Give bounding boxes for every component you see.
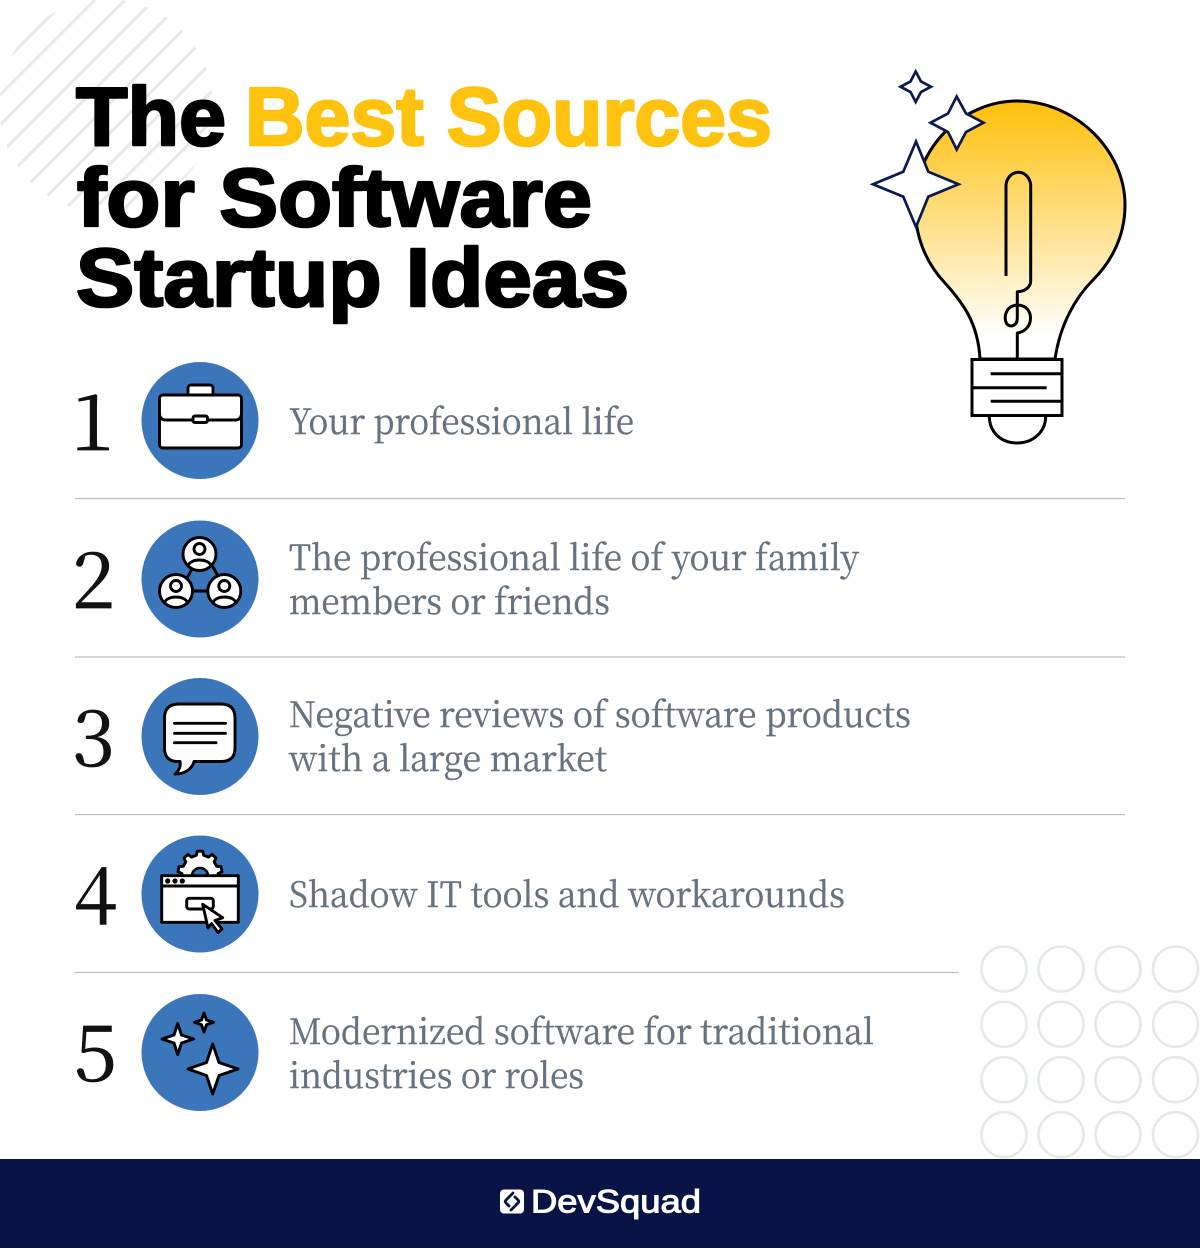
list item 5: [74, 992, 874, 1111]
number 2: 2: [72, 519, 115, 631]
list item 2: [72, 519, 860, 638]
icon: DevSquad logo mark: [500, 1190, 524, 1214]
icon: connected people: [142, 520, 258, 638]
title: for Software: [77, 151, 592, 244]
label: negative reviews: Negative reviews of software products: [289, 688, 911, 738]
label: your professional life: Your professional life: [289, 395, 634, 445]
label: negative reviews: with a large market: [288, 732, 607, 782]
footer band: [0, 1159, 1200, 1248]
icon: briefcase: [142, 362, 258, 479]
number 4: 4: [74, 834, 117, 946]
icon: sparkles: [142, 994, 258, 1111]
number 5: 5: [74, 992, 117, 1104]
label: shadow IT: Shadow IT tools and workarounds: [289, 868, 845, 918]
icon: light bulb with sparkles: [873, 72, 1125, 443]
icon: speech bubble: [142, 678, 258, 795]
number 3: 3: [72, 677, 115, 789]
label: modernized software: [289, 1005, 874, 1099]
label: negative reviews: [288, 688, 911, 782]
label: family or friends: [289, 531, 860, 625]
title: [76, 70, 772, 324]
dotted ring pattern decoration: [982, 946, 1198, 1157]
list item 1: [71, 361, 634, 479]
title: The: [76, 70, 226, 163]
list item 4: [74, 834, 845, 952]
icon: browser with gear and cursor: [142, 836, 258, 952]
label: family or friends: members or friends: [289, 575, 610, 625]
label: modernized software: industries or roles: [289, 1049, 584, 1099]
striped circle decoration: [0, 0, 212, 210]
brand name: DevSquad: [531, 1184, 701, 1220]
label: modernized software: Modernized software for traditional: [289, 1005, 874, 1055]
number 1: 1: [71, 361, 114, 473]
title: Best Sources: [245, 70, 772, 163]
list item 3: [72, 677, 911, 795]
title: Startup Ideas: [76, 231, 629, 324]
label: family or friends: The professional life of your family: [289, 531, 860, 581]
